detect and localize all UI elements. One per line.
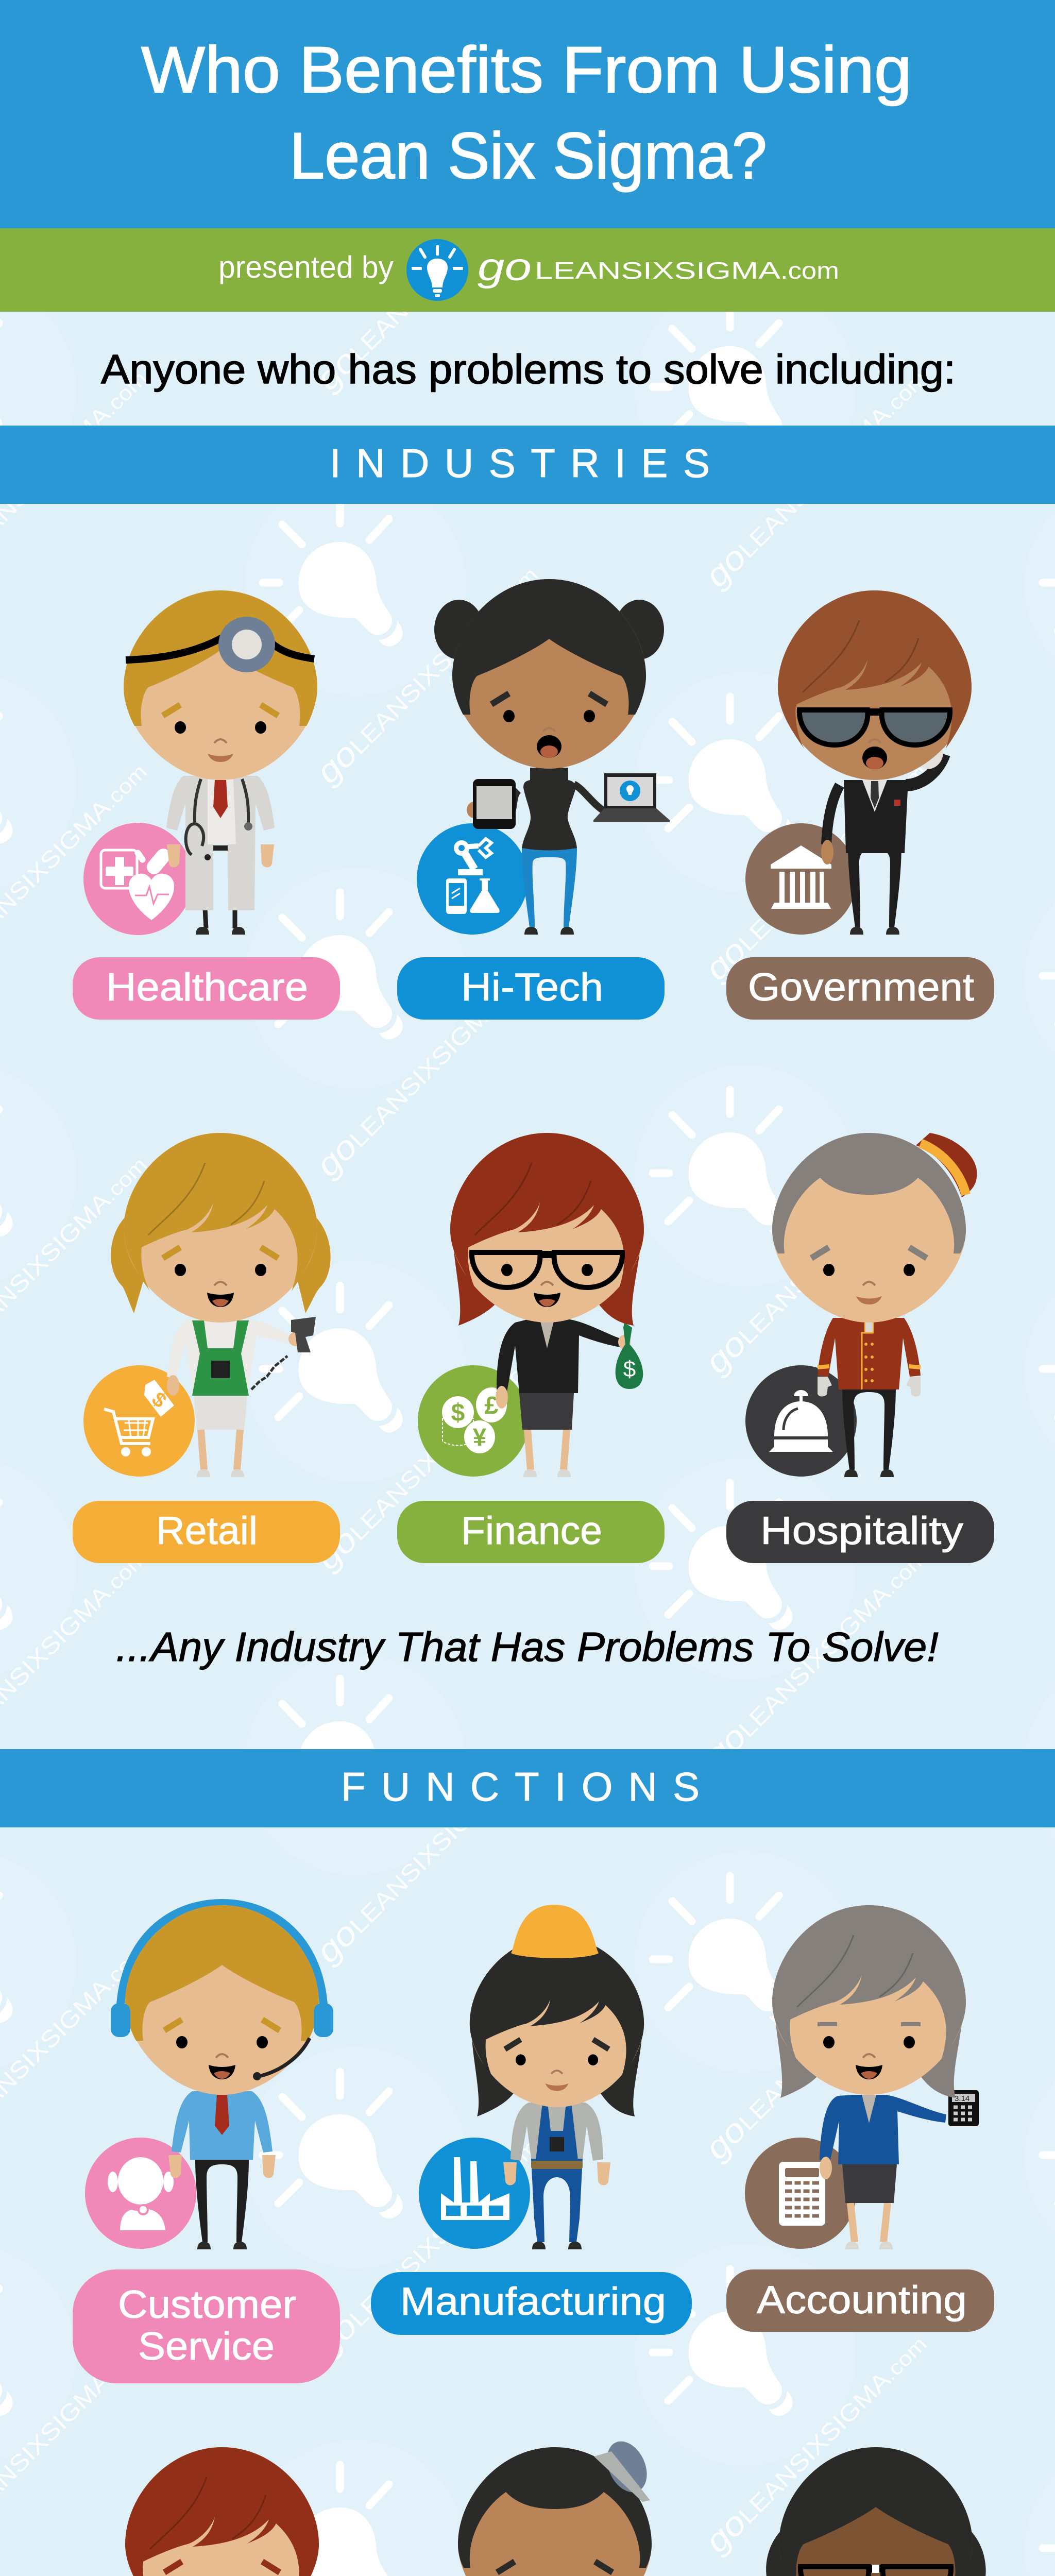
section header: industries: INDUSTRIES [330, 440, 710, 486]
profile: hr and it [726, 2447, 994, 2576]
icon: hi-tech [417, 823, 528, 935]
profile: manufacturing [371, 1905, 692, 2335]
character: call centre agent [111, 1903, 333, 2249]
logo wordmark [478, 245, 839, 289]
background watermark: diagonal brand text: goLEANSIXSIGMA.com [309, 1341, 544, 1577]
caption: industries: ...Any Industry That Has Problems To Solve! [116, 1624, 939, 1670]
background watermark: diagonal brand text: goLEANSIXSIGMA.com [697, 2324, 933, 2560]
intro line: Anyone who has problems to solve including: [101, 346, 956, 392]
character: hr woman with glasses [766, 2447, 986, 2576]
icon: finance: ¥ [473, 1424, 487, 1451]
profile: healthcare [73, 590, 340, 1020]
logo wordmark: .com [780, 257, 839, 284]
character: finance woman with money bag [450, 1133, 644, 1477]
character: accountant with calculator [772, 1905, 979, 2249]
background watermark: diagonal brand text: goLEANSIXSIGMA.com [697, 1931, 933, 2167]
icon: logo light bulb [406, 239, 468, 301]
character: man with sunglasses on phone [778, 590, 972, 935]
character: bellhop [772, 1133, 977, 1477]
presented by band [0, 228, 1055, 312]
label: customer service: Service [138, 2325, 275, 2368]
label: government: Government [748, 965, 974, 1009]
title: Lean Six Sigma? [290, 119, 767, 192]
label: hi-tech [397, 957, 665, 1020]
label: finance: Finance [461, 1509, 602, 1553]
character: factory worker with hard hat [470, 1905, 644, 2249]
label: retail: Retail [156, 1509, 258, 1553]
background watermark: diagonal brand text: goLEANSIXSIGMA.com [309, 948, 544, 1184]
background watermark: diagonal brand text: goLEANSIXSIGMA.com [697, 752, 933, 988]
icon: customer service [85, 2138, 196, 2249]
section header: industries [0, 426, 1055, 504]
background watermark: diagonal brand text: goLEANSIXSIGMA.com [697, 1145, 933, 1381]
profile: operations [73, 2447, 340, 2576]
profile: finance [397, 1133, 665, 1563]
icon: hospitality [745, 1365, 857, 1477]
character: woman with phone and laptop [434, 579, 670, 935]
background watermark: diagonal brand text: goLEANSIXSIGMA.com [309, 162, 544, 398]
icon: finance: $ [451, 1399, 465, 1427]
label: retail [73, 1501, 340, 1563]
icon: manufacturing [419, 2138, 530, 2249]
icon: government [745, 823, 857, 935]
icon: retail: $ [147, 1387, 171, 1412]
label: government [726, 957, 994, 1020]
profile: government [726, 590, 994, 1020]
character: doctor [124, 590, 317, 935]
section header: functions: FUNCTIONS [341, 1764, 700, 1809]
background watermark: diagonal brand text: goLEANSIXSIGMA.com [309, 1734, 544, 1970]
label: customer service [73, 2269, 340, 2383]
background watermark: diagonal brand text: goLEANSIXSIGMA.com [309, 2127, 544, 2363]
logo wordmark: go [478, 245, 532, 289]
character: finance woman with money bag: $ [623, 1357, 636, 1382]
label: accounting [726, 2269, 994, 2332]
title [141, 33, 912, 192]
icon: retail [83, 1365, 195, 1477]
profile: sales [397, 2435, 665, 2576]
label: customer service: Customer [118, 2283, 296, 2327]
label: hospitality [726, 1501, 994, 1563]
label: finance [397, 1501, 665, 1563]
label: hospitality: Hospitality [760, 1509, 963, 1553]
profile: accounting [726, 1905, 994, 2332]
character: accountant with calculator: 3.14 [955, 2094, 969, 2103]
label: manufacturing: Manufacturing [400, 2280, 666, 2324]
label: accounting: Accounting [757, 2278, 967, 2322]
character: operations man with wrench [125, 2447, 319, 2576]
profile: customer service [73, 1903, 340, 2383]
icon: healthcare [83, 823, 193, 935]
character: salesman with briefcase [458, 2435, 657, 2576]
background watermark: diagonal brand text: goLEANSIXSIGMA.com [697, 359, 933, 595]
background watermark: diagonal brand text: goLEANSIXSIGMA.com [697, 1538, 933, 1774]
profile: hi-tech [397, 579, 670, 1020]
section header: functions [0, 1749, 1055, 1827]
presented by text: presented by [218, 250, 394, 284]
icon: accounting [745, 2138, 856, 2249]
title banner [0, 0, 1055, 228]
label: healthcare [73, 957, 340, 1020]
icon: finance [418, 1365, 529, 1477]
logo wordmark: LEANSIXSIGMA [535, 257, 780, 284]
background watermark: diagonal brand text: goLEANSIXSIGMA.com [309, 555, 544, 791]
character: retail worker with scanner [111, 1133, 331, 1477]
icon: finance: £ [485, 1392, 499, 1419]
profile: retail [73, 1133, 340, 1563]
label: hi-tech: Hi-Tech [461, 965, 603, 1009]
profile: hospitality [726, 1133, 994, 1563]
title: Who Benefits From Using [141, 33, 912, 106]
label: healthcare: Healthcare [106, 965, 308, 1009]
label: manufacturing [371, 2272, 692, 2335]
